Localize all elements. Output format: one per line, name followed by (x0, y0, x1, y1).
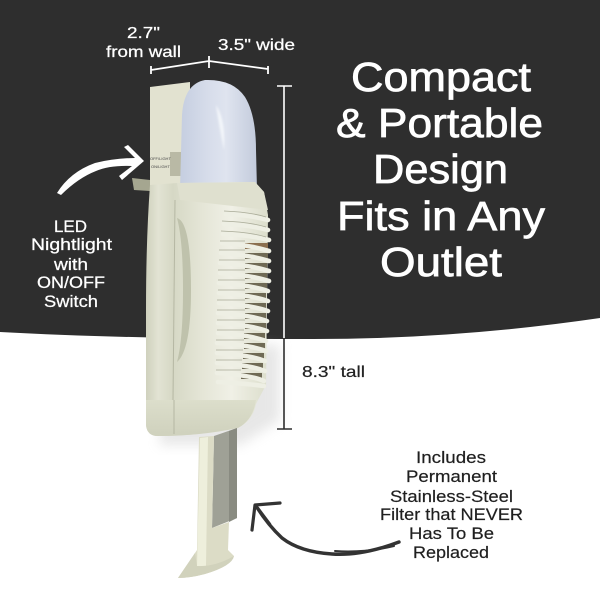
main housing (146, 182, 268, 436)
stainless-steel filter blade (212, 428, 237, 528)
nightlight dome (180, 80, 257, 190)
title: Outlet (380, 239, 503, 285)
title: Compact (351, 54, 532, 100)
wall plug prong (132, 178, 150, 191)
vent slots (241, 243, 268, 379)
width and depth dimension bracket (151, 56, 268, 74)
filter callout text (380, 448, 523, 562)
nightlight callout text (31, 217, 112, 311)
product: air purifier with nightlight (132, 80, 280, 578)
label: tall: 8.3" tall (302, 364, 365, 381)
label: from wall: from wall (106, 44, 181, 61)
on/off switch: ON/LIGHT (151, 164, 170, 169)
rib shadow lines (216, 211, 266, 370)
title (336, 54, 546, 285)
filter callout text: Includes (416, 448, 486, 467)
filter callout text: Permanent (406, 467, 497, 486)
nightlight callout text: Switch (44, 292, 98, 311)
back plate (150, 82, 190, 200)
height dimension line, dark part (277, 338, 292, 429)
label: from wall: 2.7" (127, 25, 160, 42)
dark curved background panel (0, 0, 600, 339)
title: & Portable (336, 100, 543, 146)
nightlight callout text: with (53, 255, 88, 274)
title: Design (373, 146, 508, 192)
bottom cap (146, 400, 256, 436)
hand-drawn white arrow to switch (57, 145, 144, 195)
filter callout text: Filter that NEVER (380, 505, 523, 524)
label: wide: 3.5" wide (218, 37, 295, 54)
grip slot (177, 218, 191, 362)
filter handle and foot (178, 436, 234, 578)
nightlight callout text: ON/OFF (37, 273, 105, 292)
vent ribs (217, 214, 269, 386)
title: Fits in Any (337, 193, 546, 239)
label: from wall (106, 25, 181, 61)
on/off switch (150, 152, 181, 176)
housing side seam (173, 200, 175, 400)
product shadow (160, 345, 280, 445)
filter callout text: Stainless-Steel (390, 487, 513, 506)
height dimension line, white part (277, 86, 292, 338)
on/off switch: OFF/LIGHT (150, 156, 171, 161)
hand-drawn dark arrow to filter (252, 503, 399, 554)
nightlight callout text: Nightlight (31, 235, 112, 254)
nightlight callout text: LED (54, 217, 87, 236)
filter callout text: Replaced (413, 543, 489, 562)
housing collar (177, 182, 268, 210)
filter callout text: Has To Be (409, 524, 494, 543)
